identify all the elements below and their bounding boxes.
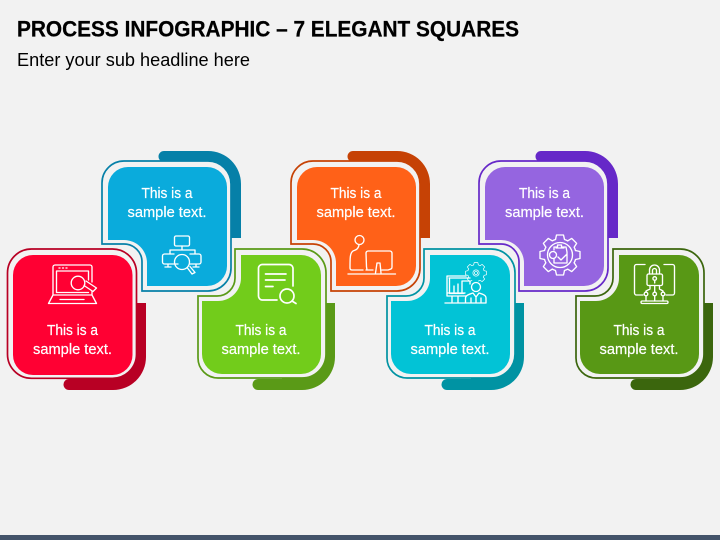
- icon: monitor with padlock: [634, 264, 674, 304]
- panel: teal square: [387, 249, 524, 390]
- text: green square: [222, 323, 300, 358]
- icon: network search: [162, 236, 201, 274]
- text: red square: [33, 323, 112, 358]
- footer bar: [0, 535, 720, 540]
- panel: dark green square: [576, 249, 713, 390]
- panel: red square: [8, 249, 146, 390]
- text: purple square: [505, 186, 584, 221]
- text: orange square: sample text.: [316, 205, 396, 221]
- text: green square: sample text.: [222, 342, 300, 358]
- text: orange square: This is a: [330, 186, 382, 202]
- text: blue square: sample text.: [128, 205, 206, 221]
- panel: purple square: [479, 151, 618, 291]
- icon: laptop with magnifier: [48, 265, 96, 304]
- text: dark green square: sample text.: [600, 342, 678, 358]
- text: purple square: This is a: [519, 186, 571, 202]
- text: red square: sample text.: [33, 342, 112, 358]
- text: red square: This is a: [47, 323, 99, 339]
- text: orange square: [316, 186, 396, 221]
- panel: blue square: [102, 151, 241, 291]
- icon: person at desk: [348, 236, 396, 274]
- text: teal square: [410, 323, 490, 358]
- subtitle: Enter your sub headline here: [17, 50, 250, 70]
- text: teal square: This is a: [424, 323, 476, 339]
- text: dark green square: [600, 323, 678, 358]
- icon: analyst with chart and gear: [445, 263, 486, 303]
- text: green square: This is a: [236, 323, 287, 339]
- panel: green square: [198, 249, 335, 390]
- text: blue square: This is a: [142, 186, 193, 202]
- text: dark green square: This is a: [614, 323, 665, 339]
- title: PROCESS INFOGRAPHIC – 7 ELEGANT SQUARES: [17, 16, 519, 42]
- panel: orange square: [291, 151, 430, 291]
- text: teal square: sample text.: [410, 342, 490, 358]
- icon: document search: [258, 264, 296, 304]
- text: blue square: [128, 186, 206, 221]
- icon: gear with clipboard: [540, 235, 580, 275]
- text: purple square: sample text.: [505, 205, 584, 221]
